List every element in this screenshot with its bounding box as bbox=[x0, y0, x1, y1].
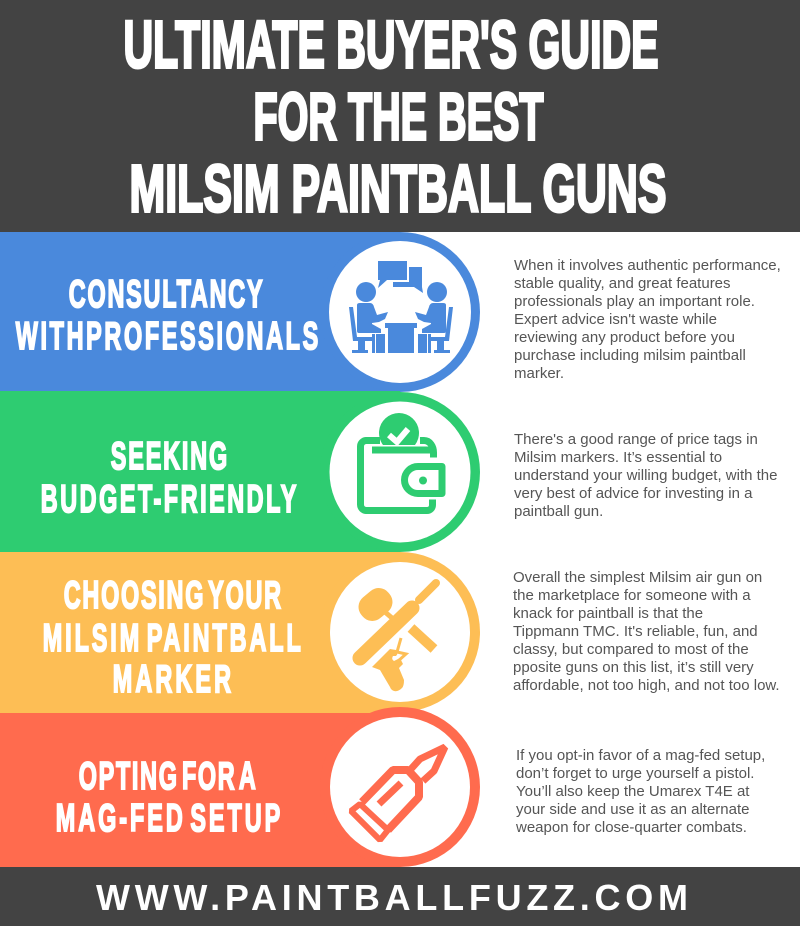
body text: mag-fed: weapon for close-quarter combats. bbox=[515, 819, 747, 836]
body text: marker: pposite guns on this list, it’s still very bbox=[513, 659, 754, 676]
body text: mag-fed: your side and use it as an alternate bbox=[516, 801, 749, 818]
heading: mag-fed: OPTING FOR A bbox=[79, 754, 256, 797]
body text: marker bbox=[513, 569, 780, 694]
body text: marker: Tippmann TMC. It's reliable, fun, and bbox=[513, 623, 758, 640]
panel: budget bbox=[0, 391, 778, 552]
body text: mag-fed: You’ll also keep the Umarex T4E at bbox=[516, 783, 750, 800]
body text: consultancy: stable quality, and great features bbox=[514, 275, 731, 292]
heading: marker: MARKER bbox=[113, 657, 231, 700]
body text: mag-fed: don’t forget to urge yourself a pistol. bbox=[516, 765, 754, 782]
body text: consultancy: When it involves authentic performance, bbox=[514, 257, 781, 274]
body text: marker: classy, but compared to most of the bbox=[513, 641, 749, 658]
icon: meeting at a table bbox=[349, 261, 453, 353]
body text: consultancy: purchase including milsim paintball bbox=[514, 347, 746, 364]
heading: budget: BUDGET-FRIENDLY bbox=[41, 477, 296, 520]
heading: marker: MILSIM PAINTBALL bbox=[43, 616, 301, 659]
body text: consultancy: Expert advice isn't waste while bbox=[514, 311, 717, 328]
icon: wallet with check bbox=[360, 413, 442, 510]
body text: budget: understand your willing budget, with the bbox=[514, 467, 778, 484]
icon: bullet bbox=[351, 747, 445, 840]
body text: consultancy: professionals play an important role. bbox=[514, 293, 755, 310]
body text: marker: knack for paintball is that the bbox=[513, 605, 703, 622]
heading: marker: CHOOSING YOUR bbox=[64, 573, 281, 616]
body text: mag-fed bbox=[515, 747, 765, 836]
body text: marker: Overall the simplest Milsim air gun on bbox=[513, 569, 762, 586]
body text: budget: Milsim markers. It’s essential to bbox=[514, 449, 722, 466]
title bbox=[124, 8, 666, 226]
title: FOR THE BEST bbox=[254, 80, 544, 154]
body text: marker: affordable, not too high, and not too low. bbox=[513, 677, 780, 694]
panel: consultancy bbox=[0, 232, 781, 392]
heading: budget bbox=[41, 434, 296, 520]
heading: consultancy: WITHPROFESSIONALS bbox=[16, 314, 318, 357]
body text: budget: paintball gun. bbox=[514, 503, 603, 520]
body text: marker: the marketplace for someone with a bbox=[513, 587, 751, 604]
title banner bbox=[0, 0, 800, 232]
heading: marker bbox=[43, 573, 301, 700]
panel: mag-fed bbox=[0, 707, 765, 867]
heading: budget: SEEKING bbox=[111, 434, 227, 477]
body text: consultancy bbox=[514, 257, 781, 382]
footer url: WWW.PAINTBALLFUZZ.COM bbox=[96, 877, 688, 918]
body text: budget: very best of advice for investing in a bbox=[514, 485, 753, 502]
body text: consultancy: marker. bbox=[514, 365, 564, 382]
heading: mag-fed bbox=[56, 754, 280, 839]
body text: budget bbox=[514, 431, 778, 520]
footer bbox=[0, 867, 800, 926]
heading: mag-fed: MAG-FED SETUP bbox=[56, 796, 280, 839]
body text: mag-fed: If you opt-in favor of a mag-fed setup, bbox=[516, 747, 765, 764]
heading: consultancy: CONSULTANCY bbox=[69, 272, 263, 315]
panel: marker bbox=[0, 552, 780, 713]
icon: paintball marker bbox=[353, 583, 436, 691]
heading: consultancy bbox=[16, 272, 318, 357]
body text: consultancy: reviewing any product before you bbox=[514, 329, 735, 346]
body text: budget: There's a good range of price tags in bbox=[514, 431, 758, 448]
